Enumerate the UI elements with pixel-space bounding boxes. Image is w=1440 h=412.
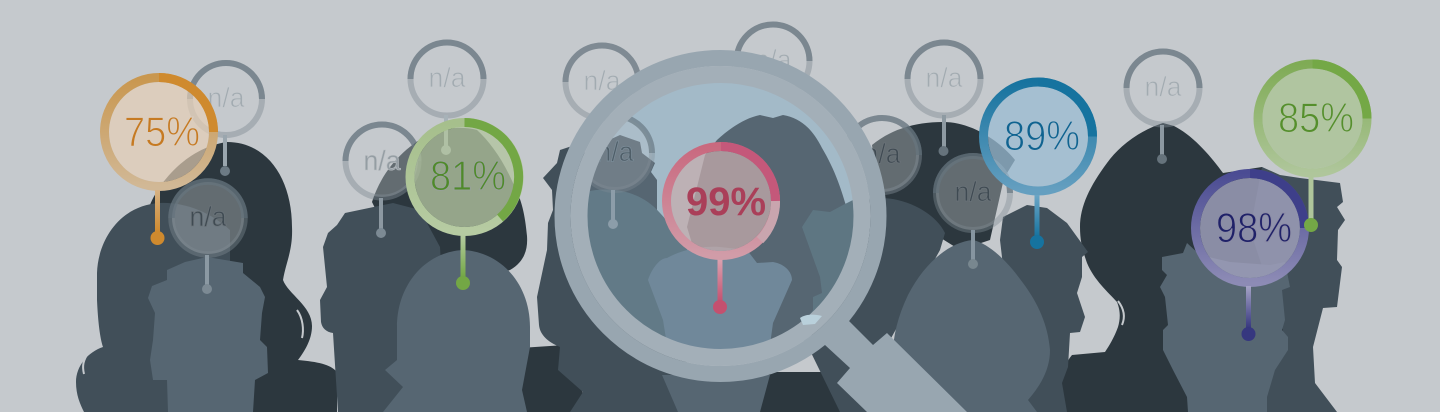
magnifier lens [588,83,854,349]
person 8 front silhouette [1160,243,1290,412]
lens glint [800,315,822,325]
n/a bubble 7: n/a [864,138,901,169]
bubble 81%: 81% [430,152,506,199]
dark figure lower left of lens [520,345,590,412]
bubble 85%: 85% [1278,94,1354,141]
magnifying glass [562,58,967,412]
person under lens silhouette [662,375,770,412]
bubble 89%: 89% [1004,112,1080,159]
n/a bubble inside lens: n/a [596,136,634,167]
n/a bubble 3 [410,42,484,155]
bubble 98% [1196,174,1304,341]
bubble 81% [410,122,519,290]
bubble 98%: 98% [1216,204,1292,251]
dark figure beneath lens [655,372,870,412]
bubble 99%: 99% [686,180,766,224]
bubble 89% [984,82,1092,249]
n/a bubble 7 [845,118,919,192]
n/a bubble 9 [936,156,1010,269]
n/a bubble 1 [190,63,262,176]
silhouettes: front row [148,240,1290,412]
person 1 front silhouette [148,257,268,412]
magnifier ring [562,58,878,374]
n/a bubble 8 [908,42,980,156]
person 5 front silhouette [885,240,1050,412]
n/a bubble 6 [736,24,810,97]
bubble 85% [1258,64,1367,232]
n/a bubble 2 [172,182,244,294]
n/a bubble 5: n/a [584,65,621,96]
person 7 far right silhouette [1250,167,1345,412]
silhouettes: middle row [76,146,1345,412]
n/a bubble 3: n/a [428,62,466,93]
n/a bubble 6: n/a [754,44,792,75]
n/a bubble 5 [566,46,638,118]
person 2 front silhouette [383,250,530,412]
person 6 back silhouette [1062,123,1300,412]
person 1 middle silhouette [76,203,230,412]
n/a bubble 9: n/a [954,176,992,207]
bubble 75% [104,78,214,245]
n/a bubble 8: n/a [926,62,963,93]
person 2 middle silhouette [320,203,445,412]
bubble 99% [666,146,776,314]
n/a bubble 10: n/a [1144,71,1182,102]
person 3 left silhouette [537,146,700,412]
person 4 middle silhouette [800,198,945,412]
person 2 shoulder [522,350,560,412]
person 4 back silhouette [872,122,1015,250]
n/a bubble 4 [346,124,418,238]
bubble 75%: 75% [124,108,200,155]
n/a bubble inside lens [591,116,655,229]
silhouettes: back row [150,122,1300,412]
magnifier handle [800,320,967,412]
n/a bubble 4: n/a [364,145,401,176]
person 1 back silhouette [150,142,337,412]
n/a bubble 10 [1126,51,1200,164]
n/a bubble 1: n/a [208,82,245,113]
person 2 back silhouette [372,128,527,300]
n/a bubble 2: n/a [190,201,227,232]
hair highlights [83,301,1124,374]
person 5 back silhouette [1000,205,1088,412]
